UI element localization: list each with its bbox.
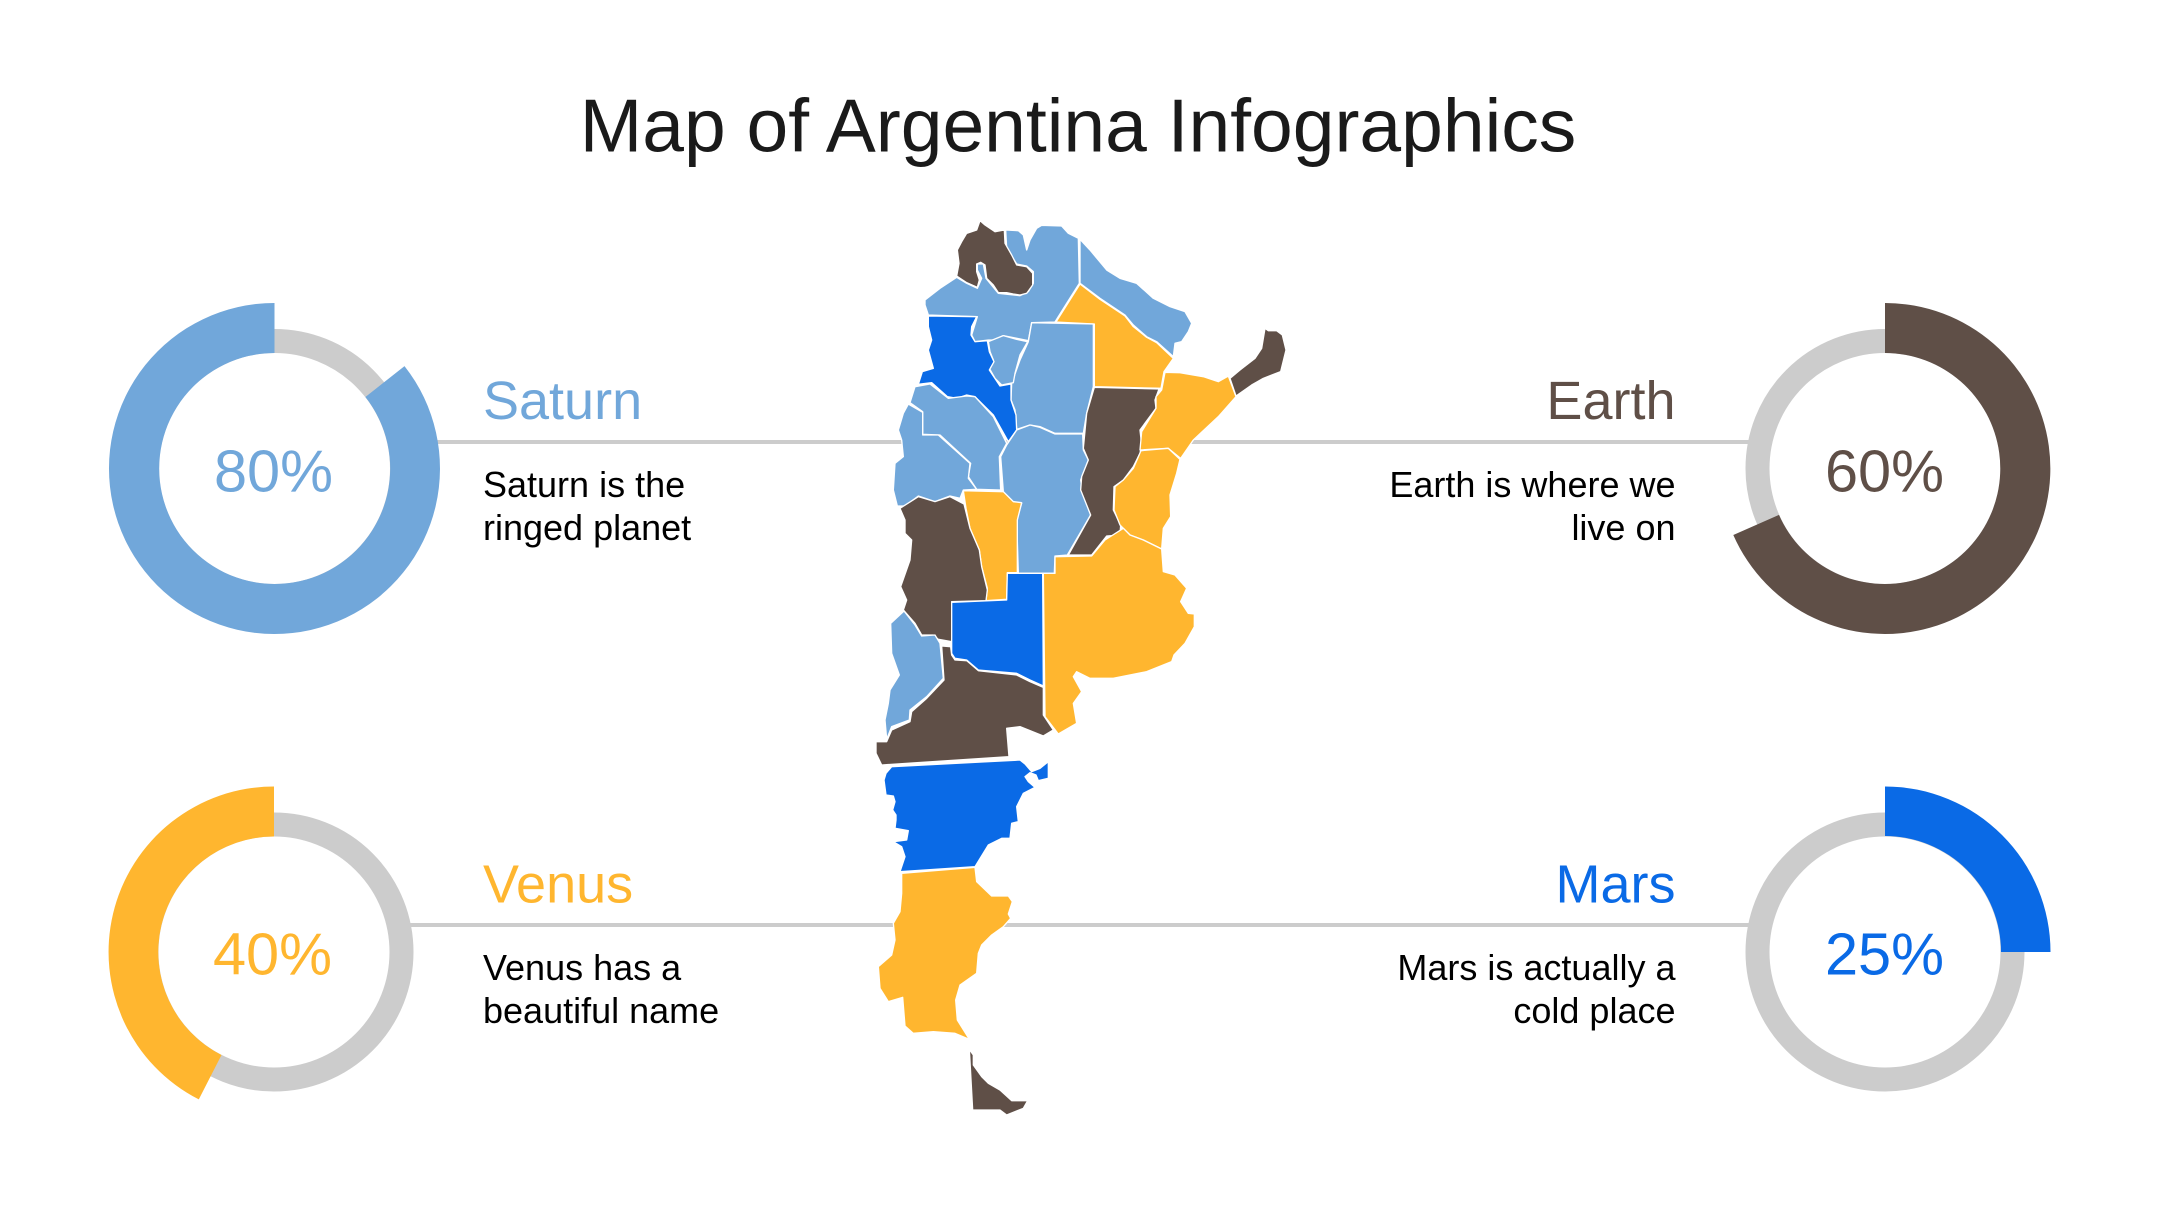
province: Mendoza [900,497,987,642]
donut: Venus 40%: 40% [213,920,332,988]
province: Formosa [1080,239,1192,357]
text: Saturn description: Saturn is the [483,464,685,505]
donut: Saturn 80% [109,303,440,634]
province: Jujuy [957,221,1033,295]
donut: Saturn 80%: 80% [214,438,333,504]
title: Map of Argentina Infographics [580,84,1576,168]
province: Santiago del Estero [1011,323,1093,433]
province: Rio Negro [876,646,1053,765]
panel: Saturn [109,303,691,634]
province: Chaco [1056,284,1173,388]
text: Mars description: Mars is actually a [1397,947,1676,988]
panel: Earth [1389,303,2050,634]
province: Salta [925,225,1079,342]
province: Tierra del Fuego [969,1049,1028,1115]
donut: Mars 25% [1758,786,2050,1080]
central provinces [876,497,1194,765]
province: Misiones [1230,328,1286,396]
heading: Saturn: Saturn [483,371,642,431]
heading: Venus: Venus [483,854,633,914]
province: Chubut [884,760,1048,872]
province: Santa Fe [1068,387,1159,555]
donut: Earth 60%: 60% [1825,438,1944,504]
province: Corrientes [1140,372,1236,458]
province: Buenos Aires [1043,528,1194,734]
map of Argentina [876,221,1286,1115]
province: Entre Rios [1114,448,1180,549]
province: San Luis [963,491,1022,601]
donut: Mars 25%: 25% [1825,920,1944,988]
panel: Venus [109,786,719,1099]
province: La Rioja [910,384,1007,490]
province: San Juan [893,404,977,506]
donut: Venus 40% [109,786,402,1099]
text: Mars description: cold place [1513,990,1676,1031]
province: Catamarca [918,316,1017,442]
northern provinces [893,221,1286,601]
panel: Mars [1397,786,2050,1080]
province: Tucuman [988,336,1028,385]
text: Earth description: live on [1571,507,1676,548]
text: Venus description: beautiful name [483,990,719,1031]
text: Venus description: Venus has a [483,947,682,988]
donut: Earth 60% [1733,303,2050,634]
province: Santa Cruz [878,867,1012,1039]
heading: Mars: Mars [1556,854,1676,914]
province: Neuquen [885,611,943,739]
text: Saturn description: ringed planet [483,507,691,548]
province: Cordoba [1001,425,1091,573]
connector lines [405,440,1770,927]
heading: Earth: Earth [1546,371,1676,431]
text: Earth description: Earth is where we [1389,464,1676,505]
southern provinces [878,760,1048,1115]
province: La Pampa [952,573,1043,686]
